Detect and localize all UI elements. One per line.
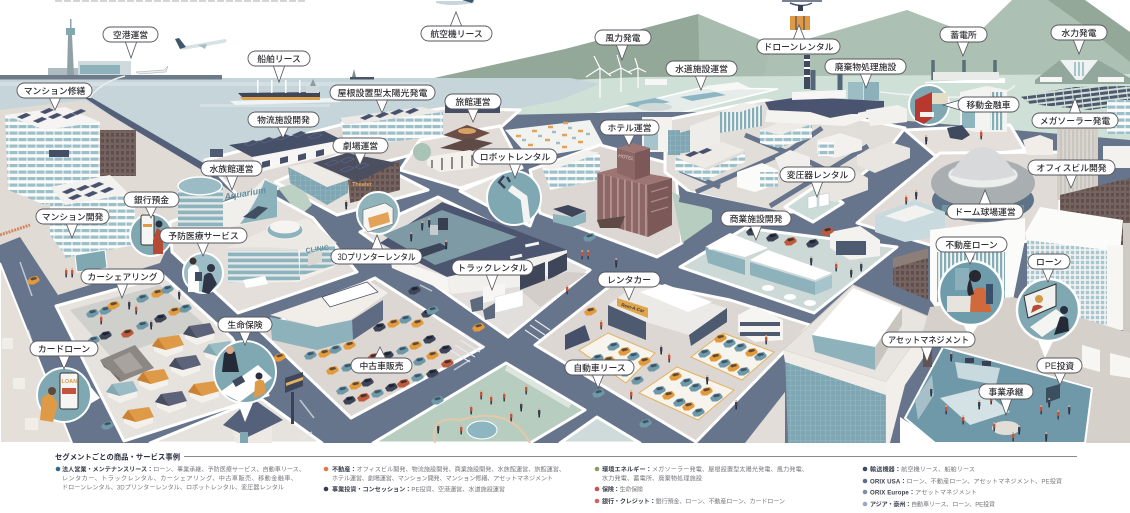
legend: corporate and maintenance bbox=[56, 466, 305, 492]
label: 船舶リース bbox=[248, 51, 310, 82]
legend: ORIX Europe: ORIX Europe：アセットマネジメント bbox=[870, 490, 977, 496]
block: car share and houses bbox=[56, 276, 268, 441]
legend: corporate and maintenance: ドローンレンタル、3Dプリンターレンタル、ロボットレンタル、変圧器レンタル bbox=[62, 484, 284, 492]
block: transformer bbox=[785, 185, 843, 222]
label: マンション開発: マンション開発 bbox=[42, 211, 103, 222]
label: 風力発電: 風力発電 bbox=[605, 32, 641, 43]
waste plant bbox=[765, 55, 907, 126]
legend: real estate bbox=[324, 466, 565, 482]
ryokan bbox=[413, 105, 500, 172]
block: park bbox=[373, 363, 585, 443]
label: レンタカー bbox=[598, 272, 660, 300]
green park beside hotel bbox=[672, 192, 742, 243]
open plan office floor bbox=[900, 347, 1092, 443]
block: bottom teal corner bbox=[560, 417, 640, 443]
label: PE投資: PE投資 bbox=[1045, 360, 1074, 371]
label: 空港運営: 空港運営 bbox=[113, 29, 148, 40]
icon: cargo ship bbox=[238, 69, 374, 100]
far right buildings bbox=[1023, 100, 1130, 250]
label: 航空機リース bbox=[421, 12, 492, 41]
label: トラックレンタル bbox=[452, 260, 533, 290]
sidewalk beside central building bbox=[745, 392, 785, 443]
clinic building: CLINIC bbox=[305, 245, 329, 255]
water treatment facility bbox=[593, 79, 778, 116]
label: ホテル運営 bbox=[600, 120, 659, 146]
label: カーシェアリング bbox=[81, 269, 164, 298]
trucks bbox=[470, 283, 523, 320]
block: insurance shop bbox=[150, 398, 322, 443]
fence bbox=[0, 225, 30, 235]
upper right buildings bbox=[893, 207, 1130, 333]
label: 銀行預金: 銀行預金 bbox=[134, 194, 169, 205]
aquarium bbox=[178, 177, 277, 229]
label: 自動車リース: 自動車リース bbox=[573, 362, 626, 373]
label: ドローンレンタル: ドローンレンタル bbox=[764, 41, 834, 52]
legend: banking and credit: 銀行・クレジット：銀行預金、ローン、不動産ローン、カードローン bbox=[602, 498, 785, 506]
north offices bbox=[668, 103, 910, 202]
block: clinic bbox=[170, 190, 357, 313]
circle: preventive medicine bbox=[183, 253, 223, 294]
circle: life insurance bbox=[214, 341, 276, 422]
label: カーシェアリング: カーシェアリング bbox=[87, 271, 158, 282]
label: マンション開発 bbox=[36, 209, 109, 238]
label: 水力発電 bbox=[1051, 25, 1107, 54]
block: used car sales bbox=[259, 278, 483, 418]
label: 不動産ローン: 不動産ローン bbox=[945, 239, 998, 250]
block: theatre bbox=[275, 150, 428, 215]
label: カードローン bbox=[30, 341, 98, 369]
label: 屋根設置型太陽光発電: 屋根設置型太陽光発電 bbox=[338, 87, 428, 98]
legend: corporate and maintenance: 法人営業・メンテナンスリース：ローン、事業承継、予防医療サービス、自動車リース、 bbox=[62, 466, 305, 474]
label: メガソーラー発電: メガソーラー発電 bbox=[1040, 115, 1110, 126]
mega solar field bbox=[1020, 86, 1130, 110]
green land bbox=[500, 74, 1130, 210]
mountains bbox=[425, 0, 1130, 90]
label: ドーム球場運営 bbox=[947, 190, 1023, 219]
block: dome bbox=[857, 152, 1060, 245]
circle: 3D printer bbox=[357, 192, 399, 234]
label: ロボットレンタル bbox=[473, 149, 557, 178]
label: 変圧器レンタル bbox=[780, 167, 855, 197]
circle: robot bbox=[487, 171, 541, 225]
label: 蓄電所 bbox=[940, 27, 987, 56]
label: オフィスビル開発: オフィスビル開発 bbox=[1036, 162, 1107, 173]
label: 自動車リース bbox=[565, 360, 634, 388]
car share parking bbox=[70, 285, 205, 358]
legend: transportation: 輸送機器：航空機リース、船舶リース bbox=[870, 466, 975, 474]
icon: wind turbines bbox=[586, 55, 646, 98]
transformer units bbox=[808, 193, 829, 209]
green road curves bbox=[880, 85, 1015, 97]
legend: corporate and maintenance: レンタカー、トラックレンタル、カーシェアリング、中古車販売、移動金融車、 bbox=[62, 474, 297, 482]
theatre bbox=[288, 153, 400, 205]
label: 水族館運営 bbox=[201, 161, 262, 190]
circle: bank deposit bbox=[130, 214, 172, 256]
label: 劇場運営 bbox=[333, 138, 388, 165]
icon: drone bbox=[782, 1, 822, 30]
label: 予防医療サービス bbox=[160, 228, 247, 256]
label: ローン: ローン bbox=[1036, 257, 1062, 267]
label: 旅館運営 bbox=[445, 94, 501, 122]
label: 水道施設運営 bbox=[666, 61, 737, 90]
label: カードローン: カードローン bbox=[38, 344, 90, 354]
legend: environment and energy: 環境エネルギー：メガソーラー発電、屋根設置型太陽光発電、風力発電、 bbox=[602, 466, 808, 474]
dome stadium bbox=[931, 147, 1035, 222]
block: offices north bbox=[665, 100, 905, 212]
label: 商業施設開発 bbox=[721, 211, 791, 240]
inner roads north offices bbox=[680, 128, 868, 206]
label: 蓄電所: 蓄電所 bbox=[950, 29, 977, 40]
rental car shop bbox=[565, 282, 783, 350]
legend: Asia and Australia: アジア・豪州：自動車リース、ローン、PE投資 bbox=[870, 500, 995, 508]
rooftop solar building bbox=[340, 107, 443, 148]
label: 物流施設開発 bbox=[248, 112, 319, 138]
small teal building under dome bbox=[875, 200, 945, 242]
block: ryokan bbox=[400, 126, 522, 188]
label: 水族館運営: 水族館運営 bbox=[210, 163, 254, 174]
block: left waterfront plaza bbox=[0, 100, 235, 295]
label: 予防医療サービス: 予防医療サービス bbox=[168, 230, 239, 241]
houses bbox=[100, 323, 235, 429]
clinic building bbox=[227, 218, 337, 288]
circle: card loan: LOAN bbox=[62, 379, 77, 385]
theatre: Theater bbox=[352, 182, 373, 188]
label: 中古車販売: 中古車販売 bbox=[360, 360, 404, 371]
label: 船舶リース: 船舶リース bbox=[257, 53, 301, 64]
footer background bbox=[0, 443, 1130, 513]
label: 物流施設開発: 物流施設開発 bbox=[257, 114, 310, 125]
label: アセットマネジメント bbox=[882, 332, 975, 362]
hotel bbox=[597, 143, 672, 237]
commercial facility bbox=[705, 226, 880, 306]
label: 航空機リース: 航空機リース bbox=[430, 28, 483, 39]
label: ドーム球場運営: ドーム球場運営 bbox=[954, 206, 1016, 217]
block: robot plaza bbox=[460, 174, 545, 226]
insurance office bbox=[223, 372, 303, 443]
city road base bbox=[0, 112, 1130, 443]
circle: real estate loan bbox=[939, 261, 1003, 338]
label: 移動金融車: 移動金融車 bbox=[966, 99, 1011, 110]
icon: flying airplane bbox=[175, 38, 227, 50]
legend: environment and energy: 水力発電、蓄電所、廃棄物処理施設 bbox=[602, 474, 702, 482]
label: 変圧器レンタル: 変圧器レンタル bbox=[787, 169, 848, 180]
legend: investment and concession: 事業投資・コンセッション：PE投資、空港運営、水道施設運営 bbox=[332, 486, 505, 494]
label: 生命保険 bbox=[218, 317, 272, 345]
label: マンション修繕: マンション修繕 bbox=[24, 85, 85, 96]
block: factory bbox=[360, 197, 590, 337]
label: PE投資 bbox=[1037, 358, 1082, 385]
icon: airplane for lease at top bbox=[436, 0, 474, 5]
block: far left strip bbox=[0, 263, 72, 443]
label: ローン bbox=[1028, 254, 1070, 282]
rental car shop: Rent-A-Car bbox=[621, 302, 645, 314]
dam bbox=[1035, 60, 1130, 84]
building: mansion development bbox=[50, 175, 135, 272]
legend heading: セグメントごとの商品・サービス事例 bbox=[55, 452, 180, 462]
label: 屋根設置型太陽光発電 bbox=[330, 85, 435, 113]
tall white building behind hotel bbox=[642, 117, 680, 155]
circle: card loan bbox=[37, 368, 100, 422]
label: 銀行預金 bbox=[124, 192, 179, 218]
wave building and small dark-roof building bbox=[542, 150, 600, 227]
buildings: mansion repair bbox=[5, 107, 100, 205]
street cars bbox=[27, 233, 652, 430]
label: 商業施設開発: 商業施設開発 bbox=[730, 213, 783, 224]
label: 廃棄物処理施設 bbox=[825, 59, 906, 88]
label: 廃棄物処理施設: 廃棄物処理施設 bbox=[835, 61, 896, 72]
legend: ORIX USA: ORIX USA：ローン、不動産ローン、アセットマネジメント、PE投資 bbox=[870, 478, 1062, 486]
label: オフィスビル開発 bbox=[1028, 160, 1115, 188]
block: commercial bbox=[680, 228, 897, 313]
used car sales bbox=[270, 280, 454, 404]
big central building bbox=[783, 285, 932, 443]
label: 生命保険: 生命保険 bbox=[227, 319, 263, 330]
block: rental car bbox=[535, 278, 810, 442]
label: メガソーラー発電 bbox=[1032, 98, 1118, 128]
label: 風力発電 bbox=[595, 30, 651, 60]
circle: loan bbox=[1017, 279, 1079, 358]
label: 事業承継 bbox=[979, 384, 1033, 415]
label: 水力発電: 水力発電 bbox=[1061, 27, 1097, 38]
park beside theatre bbox=[278, 182, 312, 216]
label: トラックレンタル: トラックレンタル bbox=[457, 262, 528, 273]
label: アセットマネジメント: アセットマネジメント bbox=[888, 335, 969, 345]
label: 不動産ローン bbox=[936, 237, 1007, 264]
block: hotel and wave building bbox=[530, 145, 682, 257]
label: 劇場運営: 劇場運営 bbox=[343, 140, 378, 151]
label: 空港運営 bbox=[103, 27, 158, 58]
title remnant cut off at top bbox=[55, 0, 305, 2]
label: 水道施設運営: 水道施設運営 bbox=[675, 63, 728, 74]
block: bank van plaza bbox=[905, 125, 1025, 160]
park bbox=[434, 368, 570, 443]
ryokan village bbox=[505, 120, 604, 158]
right bottom office roof bbox=[920, 297, 1130, 443]
label: 3Dプリンターレンタル: 3Dプリンターレンタル bbox=[338, 251, 416, 262]
label: ホテル運営: ホテル運営 bbox=[608, 122, 652, 133]
label: 3Dプリンターレンタル bbox=[331, 235, 422, 264]
people on streets bbox=[65, 130, 982, 299]
label: マンション修繕 bbox=[17, 83, 92, 110]
dark brown tower bbox=[100, 130, 136, 176]
airport bbox=[0, 19, 222, 100]
power station bbox=[925, 60, 1005, 83]
label: ドローンレンタル bbox=[757, 25, 840, 54]
legend: real estate: 不動産：オフィスビル開発、物流施設開発、商業施設開発、水族館運営、旅館運営、 bbox=[332, 466, 565, 474]
circle: mobile finance vehicle bbox=[909, 85, 949, 125]
hotel: HOTEL bbox=[618, 153, 635, 162]
main roads east bbox=[680, 140, 945, 245]
label: 旅館運営: 旅館運営 bbox=[455, 96, 491, 107]
label: レンタカー: レンタカー bbox=[607, 274, 651, 285]
block: logistics and solar waterfront bbox=[205, 108, 520, 198]
factory and floor bbox=[380, 202, 587, 307]
road details bbox=[20, 262, 875, 440]
label: 事業承継: 事業承継 bbox=[988, 386, 1024, 397]
label: 中古車販売 bbox=[351, 347, 412, 373]
label: 移動金融車 bbox=[943, 97, 1019, 112]
legend: real estate: ホテル運営、劇場運営、マンション開発、マンション修繕、アセットマネジメント bbox=[332, 474, 553, 482]
legend: insurance: 保険：生命保険 bbox=[602, 486, 643, 494]
bank van building bbox=[947, 86, 1007, 140]
logistics center bbox=[210, 131, 345, 172]
bridge bbox=[85, 98, 212, 175]
rental car parking lots bbox=[579, 320, 774, 420]
legend: environment and energy bbox=[595, 466, 808, 482]
label: ロボットレンタル: ロボットレンタル bbox=[480, 151, 550, 162]
aquarium: Aquarium bbox=[223, 185, 267, 202]
sea bbox=[0, 78, 600, 170]
